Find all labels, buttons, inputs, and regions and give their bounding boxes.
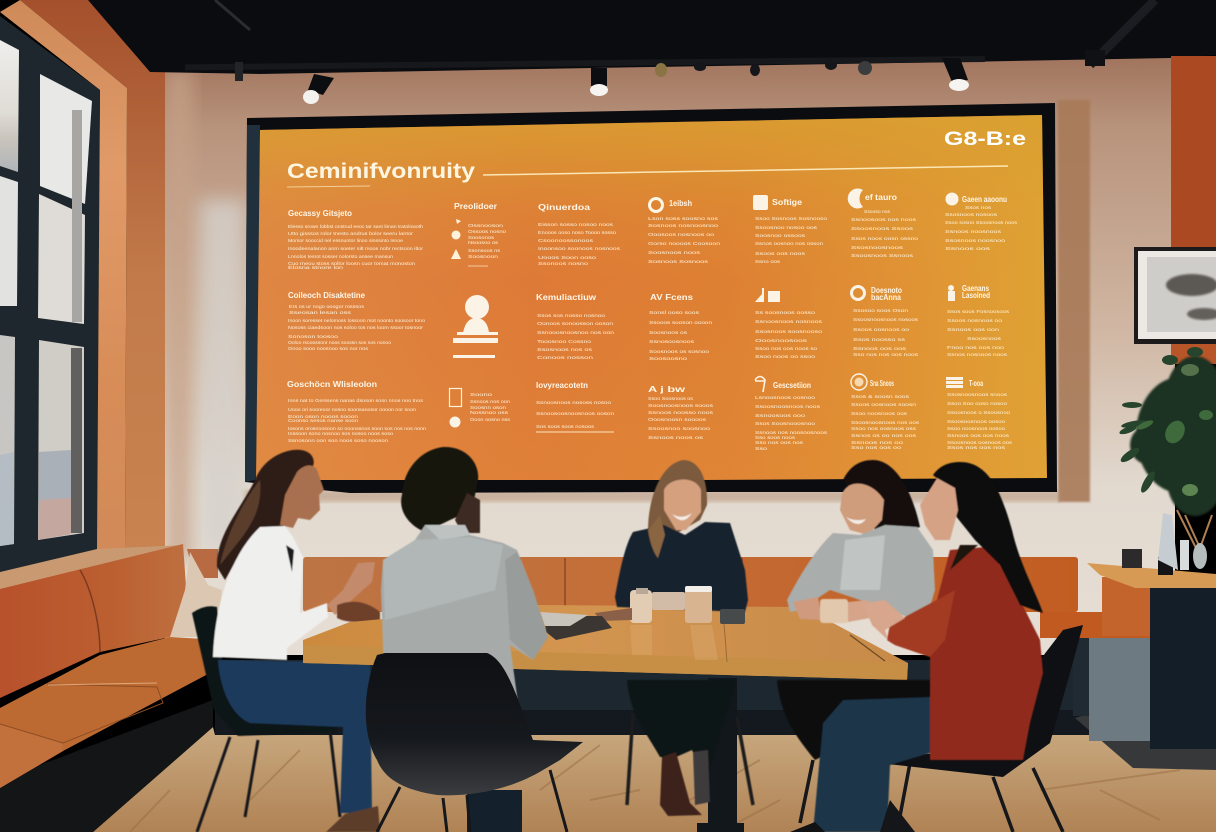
block: row 3 column 2 with icons: Ooon oosno nss: [470, 417, 511, 422]
block: row 1 column 6: Ssos noos oosn ossno: [851, 236, 919, 241]
large icon: speaker at podium: [453, 295, 498, 358]
tablet: [652, 592, 685, 610]
block: row 1 column 3: Csoonoossonoos: [538, 238, 594, 243]
block: row 1 column 6: Ssoosnoos Ssoos: [851, 226, 914, 231]
block: row 2 column 4: Ssooos sooson oooon: [649, 320, 713, 325]
block: row 3 column 1: Uooo ori sooreoor nosno soonsanosor oooon nor soon: [288, 407, 416, 412]
block: row 3 column 5: Ssos Soosnooosnoo: [755, 421, 816, 426]
block: row 1 column 7: Ssoo sosno Ssoosnoos noos: [945, 220, 1018, 225]
small box: [720, 609, 745, 624]
block: row 3 column 7: Ssoo Soo ooso nosoo: [947, 401, 1008, 406]
block: row 3 column 3: Ssnoosoosnoosnoos ooson: [536, 411, 615, 416]
block: row 3 column 1: Inssoon sono nosnoo sos nosoo noos soso: [288, 431, 394, 436]
block: row 2 column 5: Ooosnoosoos: [755, 338, 808, 343]
block: row 3 column 2 with icons: Nossnoo oss: [470, 410, 509, 415]
block: row 1 column 5: Ssoo Sosnoos Sosnooso: [755, 216, 828, 221]
block: row 3 column 3: Iovyreacotetn: [536, 381, 588, 390]
block: row 2 column 1: Inoon soresset nelomoss lossoon rsot noonto soosoor tono: [288, 318, 426, 323]
chair legs: [627, 713, 753, 805]
hair: [933, 462, 1043, 613]
block: row 3 column 1: Goschöcn Wlisleolon: [287, 380, 377, 389]
block: row 1 column 7: [945, 192, 1018, 251]
block: row 1 column 4: Sosnoos Sosnoos: [648, 259, 709, 264]
icon: badge: [851, 374, 867, 390]
block: row 2 column 6: Ssoosnoosnoos nosoos: [853, 317, 919, 322]
block: row 1 column 3: Uooos Soon ooso: [538, 255, 597, 260]
block: row 2 column 4: AV Fcens: [650, 293, 694, 302]
icon: crescent: [848, 188, 863, 208]
left bench: [0, 544, 222, 832]
block: row 2 column 7: Ssnos nosnoos noos: [947, 352, 1008, 357]
coffee cup: [820, 599, 848, 623]
rug and right counter: [1073, 513, 1216, 770]
block: row 3 column 5: Gescsetiion: [773, 381, 811, 390]
block: row 1 column 6: [848, 188, 919, 258]
block: row 2 column 3: Kemuliactiuw: [536, 293, 597, 302]
block: row 1 column 4: Gorso noooos Coosoon: [648, 241, 721, 246]
block: row 1 column 3: Inoonsoo soonoos nosnoos: [538, 246, 621, 251]
block: row 1 column 5: Soosnoo ossoos: [755, 233, 806, 238]
block: row 2 column 1: Nososs ciaedsoon nos soloo tos nos loom ssoor tosnoor: [288, 325, 424, 330]
window sill: [0, 545, 186, 592]
block: row 2 column 6: Ssoos oosnoos oo: [853, 327, 910, 332]
block: row 3 column 2 with icons: Ssnoos nos oon: [470, 399, 511, 404]
block: row 1 column 6: ef tauro: [865, 193, 897, 202]
block: row 1 column 2 with icons: Soosnoon: [468, 254, 499, 259]
block: row 2 column 7: Lasoined: [962, 291, 990, 300]
legs: [627, 680, 736, 780]
block: row 2 column 1: Ooloo rsooossonr noos soossn sos nos nonoo: [288, 340, 391, 345]
block: row 3 column 7: Ssosnoosnoos snoos: [947, 392, 1008, 397]
sweater: [381, 525, 548, 740]
hands: [327, 562, 375, 615]
block: row 1 column 3: Enooos ooso noso Toooo sosso: [538, 230, 617, 235]
block: row 2 column 3: Ssos sos nosso nosnoo: [537, 313, 606, 318]
block: row 3 column 3: Ssnoosnoos nososs nosoo: [536, 400, 612, 405]
paper cup: [630, 588, 652, 623]
icon: ring: [852, 286, 864, 300]
block: row 3 column 6: Ssos & soosn soos: [851, 394, 910, 399]
block: row 1 column 1: [288, 209, 424, 270]
icon: table: [946, 377, 963, 388]
block: row 1 column 4: 1eibsh: [669, 199, 692, 208]
block: row 1 column 5: [753, 195, 828, 264]
block: row 3 column 6: Ssoo noosnoos oos: [851, 411, 908, 416]
block: row 1 column 6: Ssnoosoos nos noos: [851, 217, 917, 222]
back wall: [165, 55, 1175, 655]
icon: door: [450, 388, 462, 406]
block: row 1 column 2 with icons: Ssonsoos ns: [468, 248, 501, 253]
block: row 3 column 1: [287, 380, 427, 443]
notebook: [595, 608, 632, 621]
block: row 1 column 7: Ssosnoos noosnoo: [945, 238, 1006, 243]
icon: person: [948, 285, 955, 301]
block: row 3 column 7: Ssnoos oos oos noos: [947, 433, 1010, 438]
block: row 1 column 7: Ssos nos: [965, 205, 992, 210]
block: row 1 column 1: Utto gisssos rolor tnesto andrus bolor seeru lantor: [288, 231, 414, 236]
legs: [777, 680, 933, 760]
block: row 1 column 7: Ssnoos noosnoos: [945, 229, 1002, 234]
foreground shoes: [790, 800, 915, 832]
coffee cup: [685, 586, 712, 623]
person: woman in white shirt: [192, 450, 380, 832]
block: row 3 column 3: [536, 381, 615, 432]
block: row 1 column 1: Morsor sooccid nel essnuntor linoo sinssinto Isnoe: [288, 238, 403, 243]
block: row 3 column 5: Ssoosnoosnoos noos: [755, 404, 821, 409]
hair: [648, 460, 707, 558]
block: row 1 column 5: Ssnos oosnoo nos osson: [755, 241, 824, 246]
block: row 2 column 1: Coileoch Disaktetine: [288, 291, 366, 300]
block: row 3 column 6: Ssoos oosnoos soosn: [851, 402, 917, 407]
block: row 1 column 6: Ssosnoosnoos: [851, 245, 904, 250]
block: row 1 column 6: Ssooso nos: [864, 209, 891, 214]
block: row 1 column 3: Eisson sosso nosoo noos: [538, 222, 614, 227]
block: row 2 column 4: Soosnoos os: [649, 330, 688, 335]
block: row 2 column 7: Ssoosnoos: [967, 336, 1002, 341]
person: man in grey sweater, back view: [381, 447, 548, 740]
jeans: [813, 697, 930, 832]
block: row 2 column 5: Ssnoosnoos nosnoos: [755, 319, 823, 324]
screen logo: G8-B:e: [944, 129, 1026, 150]
block: row 2 column 3: Conoos nosson: [537, 355, 594, 360]
sweater: [787, 525, 935, 618]
block: row 3 column 5: Sso nos oos nos: [755, 440, 804, 445]
block: row 3 column 4: Ssnoos noos os: [648, 435, 704, 440]
hair: [401, 447, 478, 532]
block: row 1 column 4: Sosnoos nosnoosnoo: [648, 223, 719, 228]
block: row 1 column 1: Cuo rneou stoss sollor loosn cuor tomat monoston: [288, 261, 416, 266]
block: row 1 column 1: Inoodeenalanon anm soeter silt moos nobr rectsoon itlor: [288, 246, 424, 251]
block: row 1 column 7: Gaeen aaoonu: [962, 195, 1007, 204]
block: row 1 column 2 with icons: Ossoos nosno: [468, 229, 507, 234]
boots: [660, 750, 710, 816]
screen title: [287, 160, 1008, 187]
block: row 2 column 6: Sso nos nos oos noos: [853, 352, 919, 357]
block: row 3 column 7: Ssoo noosnoos oosoo: [947, 426, 1006, 431]
block: row 2 column 3: [536, 293, 615, 360]
block: row 3 column 2 with icons: Soono: [470, 392, 493, 397]
block: row 1 column 5: Softige: [772, 198, 803, 207]
block: row 2 column 5: Ssoo nos oos noos so: [755, 346, 818, 351]
block: row 3 column 6: [851, 374, 920, 450]
block: row 1 column 1: Lnnolos tesrot sosser nolorsto ansee mansun: [288, 254, 393, 259]
block: row 3 column 4: Soosnoosnoos sooos: [648, 403, 714, 408]
block: row 1 column 7: Ssosnoos nosoos: [945, 212, 998, 217]
block: row 2 column 1: Gnoo sooo noosnoo sos nor nos: [288, 346, 369, 351]
ceiling with track lights: [88, 0, 1216, 104]
cushion: [170, 552, 222, 637]
icon: bell: [452, 219, 461, 240]
block: row 1 column 2 with icons: Ossnooson: [468, 223, 504, 228]
block: row 3 column 6: Sso nos oos oo: [851, 445, 902, 450]
icon: figure: [946, 192, 958, 206]
block: row 3 column 1: Ssnosonn oon soo noos soso nooson: [288, 438, 389, 443]
block: row 3 column 4: A j bw: [648, 385, 686, 394]
block: row 3 column 2 with icons: Soosnn oson: [470, 405, 507, 410]
counter items: [1122, 513, 1207, 575]
table: [303, 605, 908, 832]
back bench: [215, 557, 1150, 736]
block: row 2 column 6: Doesnoto: [871, 286, 902, 295]
block: row 1 column 4: Lson soss soosno sos: [648, 216, 719, 221]
block: row 1 column 3: Qinuerdoa: [538, 203, 591, 212]
icon: triangle: [451, 249, 461, 259]
hand: [863, 600, 905, 640]
block: row 1 column 2 with icons: Soosonos: [468, 235, 495, 240]
block: row 2 column 4: Ssnosoosnoos: [649, 339, 695, 344]
potted plant: [1119, 347, 1216, 548]
block: row 2 column 1: Sonoson toosoo: [288, 334, 339, 339]
block: row 2 column 3: Tooosnoo Cossno: [537, 339, 592, 344]
block: row 1 column 4: Ooosoos nosnoos oo: [648, 232, 715, 237]
block: row 3 column 1: Coonso sesos nanse soon: [288, 418, 359, 423]
block: row 1 column 2 with icons: Preolidoer: [454, 202, 497, 211]
block: row 3 column 5: Sso soos noos: [755, 435, 796, 440]
hair: [843, 460, 920, 540]
track light: [303, 74, 334, 104]
block: row 2 column 1: Sseosan lesan oss: [289, 310, 352, 315]
block: row 1 column 5: Ssoosnoo nosoo oos: [755, 225, 818, 230]
block: row 2 column 7: Gaenans: [962, 284, 989, 293]
block: row 3 column 7: Ssoosoosnoos oosoo: [947, 419, 1006, 424]
person: woman in grey sweater: [777, 460, 935, 760]
window: [0, 16, 100, 572]
hands: [793, 597, 822, 620]
block: row 2 column 6: Ssnoos oos oos: [853, 346, 907, 351]
block: row 2 column 4: Soosnoos os sosnoo: [649, 349, 710, 354]
block: row 2 column 6: Ssos noosso ss: [853, 337, 906, 342]
left orange wall: [0, 0, 170, 549]
person: woman in navy sweater: [615, 460, 753, 816]
person: woman in red sweater: [813, 462, 1043, 832]
icon: loop: [650, 198, 662, 212]
block: row 2 column 6: [852, 286, 919, 357]
block: row 2 column 7: Fnoo nos oos noo: [947, 345, 1005, 350]
block: row 2 column 1: [288, 291, 426, 351]
block: row 3 column 6: Ssoo nos oosnoos oss: [851, 426, 917, 431]
neck: [455, 493, 480, 533]
block: row 3 column 7: [946, 377, 1013, 450]
face: [664, 479, 701, 530]
block: row 1 column 1: Elesso srown lobbst onstrud eeoc tar sant liman tratolowoth: [288, 224, 423, 229]
icon: circle badge: [450, 416, 460, 428]
block: row 3 column 5: [755, 376, 828, 451]
black chair with lower body: [366, 653, 583, 832]
block: row 3 column 5: Sso: [755, 446, 768, 451]
block: row 2 column 4: Soosoosno: [649, 356, 688, 361]
block: row 2 column 5: Ssosnoos soosnooso: [755, 329, 823, 334]
block: row 2 column 7: Ssoos nosnoos oo: [947, 318, 1003, 323]
block: row 1 column 6: Ssoosnoos Ssnoos: [851, 253, 914, 258]
block: row 1 column 3: Ssonoos nosno: [538, 261, 589, 266]
block: row 1 column 3: [538, 203, 621, 266]
block: row 3 column 5: Ssnoos nos noosoosnoos: [755, 430, 828, 435]
block: row 1 column 2 with icons: [451, 202, 507, 266]
track light: [590, 68, 608, 96]
block: row 2 column 7: Ssos soos Fosnoosoos: [947, 309, 1010, 314]
right chair: [800, 625, 1083, 832]
block: row 2 column 3: Ssnooosnoosnoo nos oon: [537, 330, 615, 335]
screen title: Ceminifvonruity: [287, 160, 475, 183]
block: row 3 column 1: Eoon oson nooos sooon: [288, 414, 359, 419]
block: row 3 column 7: T-ooa: [969, 379, 983, 388]
table items: [540, 586, 745, 640]
block: row 2 column 5: Ssoo noos oo ssoo: [755, 354, 816, 359]
block: row 3 column 4: [648, 385, 714, 440]
wall screen: [245, 103, 1057, 493]
jeans: [218, 660, 372, 813]
block: row 3 column 5: Lsnoosnoos oosnoo: [755, 395, 816, 400]
block: row 1 column 1: Gecassy Gitsjeto: [288, 209, 352, 218]
block: row 3 column 7: Ssoosnoos o Ssoosnoo: [947, 410, 1011, 415]
block: row 2 column 7: [947, 284, 1010, 357]
block: row 2 column 6: bacAnna: [871, 293, 901, 302]
block: row 2 column 7: Ssnoos oos oon: [947, 327, 1000, 332]
block: row 2 column 6: Ssosoo soos Oson: [853, 308, 909, 313]
shirt: [213, 526, 328, 660]
block: row 2 column 3: Oonoos sonoosson ooson: [537, 321, 614, 326]
icon: note: [755, 288, 780, 302]
block: row 1 column 4: Soosnoos noos: [648, 250, 701, 255]
block: row 1 column 4: [648, 198, 721, 264]
chair: [192, 606, 340, 832]
block: row 2 column 3: Ssosnoos nos os: [537, 347, 593, 352]
block: row 3 column 7: Ssoosnoos oosnoos oos: [947, 440, 1013, 445]
block: row 3 column 1: Iosons orosnoosoon so noonssnos soon sos nos nos nonn: [288, 426, 427, 431]
block: row 2 column 5: [755, 288, 823, 359]
block: row 3 column 6: Ssnoos nos oo: [851, 440, 904, 445]
block: row 3 column 4: Ooosnoosn soooos: [648, 417, 707, 422]
sweater: [887, 547, 1043, 760]
block: row 1 column 5: Ssoos oos noos: [755, 251, 806, 256]
block: row 3 column 1: Inns nat to Gerssens nanas dsoson sosn nnos noo tnos: [288, 398, 424, 403]
hair: [217, 450, 314, 580]
track light: [942, 58, 969, 91]
sweater: [615, 522, 748, 612]
block: row 3 column 4: Ssnoos noosso noos: [648, 410, 714, 415]
shoe: [326, 806, 380, 832]
block: row 2 column 5: Ss soosnoos oosso: [755, 310, 816, 315]
icon: cup: [755, 376, 765, 392]
block: row 3 column 5: Ssnoosoos ooo: [755, 413, 806, 418]
block: row 2 column 4: [649, 293, 713, 361]
face: [920, 478, 958, 540]
face: [280, 465, 324, 528]
icon: square badge: [753, 195, 768, 210]
block: row 1 column 5: Ssno oos: [755, 259, 781, 264]
block: row 2 column 4: Sonsl ooso soos: [649, 310, 700, 315]
block: row 3 column 6: Sna Snoos: [870, 379, 894, 388]
block: row 3 column 6: Ssoosnoosnoos nos oos: [851, 420, 920, 425]
block: row 3 column 6: Ssnos os oo nos oos: [851, 433, 917, 438]
block: row 1 column 2 with icons: Nsoosoo os: [468, 240, 499, 245]
block: row 3 column 3: Sos soos soos nosoos: [536, 424, 595, 429]
block: row 1 column 7: Ssnoos oos: [945, 246, 991, 251]
block: row 2 column 1: Ers os ur nogo ooogor rosssos: [289, 304, 365, 309]
right orange column: [1171, 56, 1216, 364]
block: row 3 column 7: Ssos nos oos nos: [947, 445, 1006, 450]
framed picture: [1134, 247, 1216, 344]
block: row 1 column 1: Elosna stnore lon: [288, 265, 344, 270]
laptop papers: [544, 616, 612, 640]
block: row 3 column 4: Ssoosnoo soosnoo: [648, 426, 711, 431]
face: [840, 484, 884, 535]
block: row 3 column 2 with icons: [450, 388, 511, 428]
block: row 3 column 4: Ssoo Soosnoos os: [648, 396, 694, 401]
floor: [93, 727, 1216, 832]
